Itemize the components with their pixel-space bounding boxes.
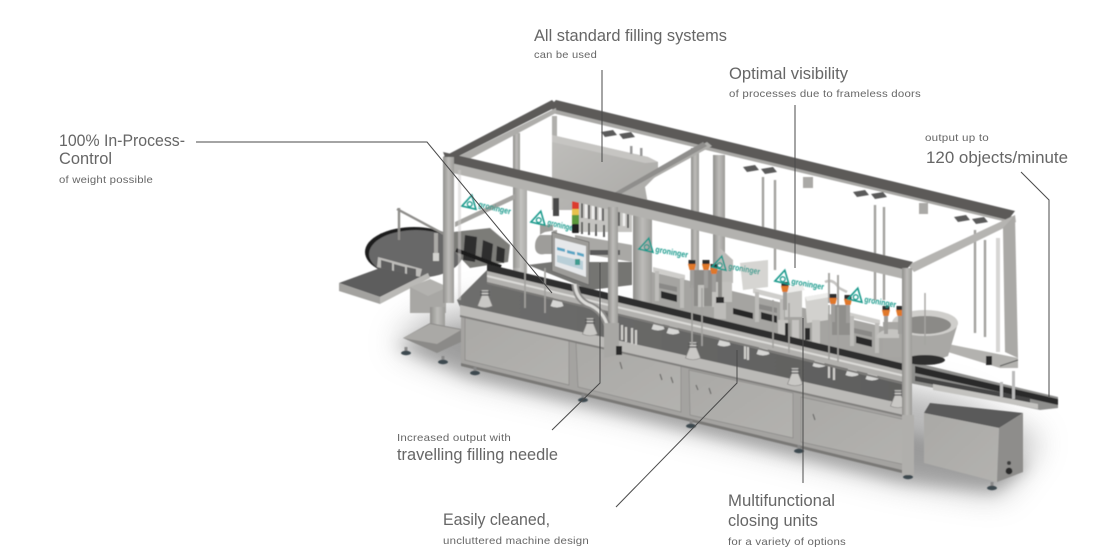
logo 5: groninger — [791, 276, 825, 292]
leader line: closing units — [802, 318, 804, 483]
callout: travelling filling needle — [397, 432, 558, 464]
leader line: output — [1021, 172, 1049, 398]
callout: in-process control: of weight possible — [59, 174, 153, 186]
callout: all standard filling systems: can be used — [534, 49, 597, 61]
right control cabinet — [924, 403, 1023, 482]
closing stations — [652, 248, 905, 370]
product transport rail — [487, 264, 907, 385]
vibratory bowl — [892, 293, 958, 365]
touchscreen control panel — [552, 232, 589, 285]
leader line: easily cleaned — [616, 350, 737, 507]
callout: easily cleaned — [443, 511, 589, 547]
callout: closing units: Multifunctional — [728, 492, 835, 510]
callout: optimal visibility: Optimal visibility — [729, 65, 849, 83]
leader line: optimal visibility — [794, 105, 796, 268]
callout: easily cleaned: Easily cleaned, — [443, 511, 550, 529]
logo 5 — [775, 269, 825, 292]
filling stations — [528, 198, 652, 305]
logo 6: groninger — [864, 294, 897, 310]
callout: output: 120 objects/minute — [926, 149, 1068, 167]
callout: in-process control: 100% In-Process- — [59, 132, 185, 150]
callout: optimal visibility: of processes due to frameless doors — [729, 88, 921, 100]
leader line: in-process control — [196, 142, 552, 293]
leader line: filling systems — [601, 70, 603, 162]
callout: all standard filling systems: All standard filling systems — [534, 27, 727, 45]
right side frame — [908, 215, 1018, 368]
machine base with door panels — [461, 307, 997, 490]
logo 3: groninger — [655, 244, 689, 260]
callout: travelling filling needle: Increased output with — [397, 432, 511, 444]
callout: closing units: closing units — [728, 512, 818, 530]
groninger logos — [462, 194, 897, 310]
callout: all standard filling systems — [534, 27, 727, 61]
machine deck — [457, 270, 910, 418]
right product conveyor and hopper — [905, 360, 1058, 410]
logo 2 — [531, 210, 577, 233]
callout: output: output up to — [925, 132, 989, 144]
back frame of enclosure — [455, 100, 1015, 337]
signal tower — [572, 201, 579, 233]
logo 4 — [712, 255, 761, 277]
callout: in-process control — [59, 132, 185, 186]
product pipe — [575, 284, 622, 358]
logo 1: groninger — [478, 199, 513, 217]
logo 6 — [848, 287, 897, 310]
callout: closing units: for a variety of options — [728, 536, 846, 548]
callout: closing units — [728, 492, 846, 548]
logo 4: groninger — [728, 261, 761, 277]
callout: travelling filling needle: travelling filling needle — [397, 446, 558, 464]
left part of top frame — [443, 100, 558, 164]
machine illustration — [339, 100, 1058, 490]
leader line: filling needle — [552, 263, 600, 430]
filling unit housing — [552, 135, 658, 210]
left sorting bowl and outfeed tray — [339, 208, 510, 364]
floor shadow — [395, 300, 1040, 495]
callout: easily cleaned: uncluttered machine design — [443, 535, 589, 547]
front top frame and posts — [443, 152, 914, 475]
logo 2: groninger — [547, 217, 577, 233]
callout: in-process control: Control — [59, 150, 112, 168]
callout: optimal visibility — [729, 65, 921, 100]
logo 1 — [462, 194, 513, 217]
logo 3 — [639, 237, 689, 260]
mid cross beam — [607, 142, 712, 201]
callout: output — [925, 132, 1068, 167]
